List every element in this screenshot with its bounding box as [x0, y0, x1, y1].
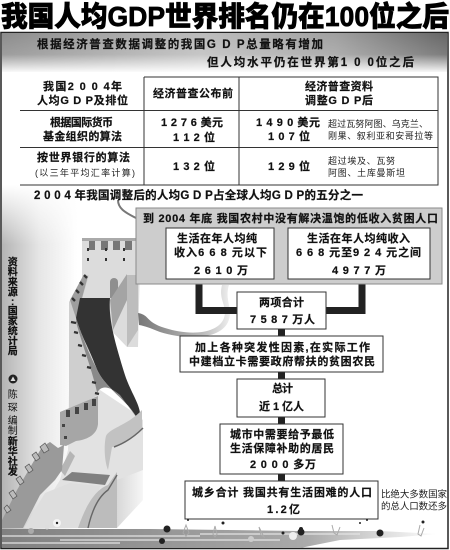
stairs: [60, 451, 75, 476]
box: urban: 生活保障补助的居民: [230, 441, 334, 455]
box: urban: 2 0 0 0 多万: [250, 457, 316, 471]
walkway lower fill: [117, 430, 143, 528]
subtitle line 1: 根据经济普查数据调整的我国G D P总量略有增加: [37, 37, 323, 51]
table header: before: 经济普查公布前: [153, 86, 233, 100]
comparison table: [20, 77, 438, 185]
source text: 统: [8, 324, 18, 337]
source text: 来: [8, 275, 18, 288]
value: 1276: 1 2 7 6 美元: [161, 115, 223, 129]
table header: after line 2: 调整G D P后: [305, 93, 373, 107]
box: additional poor: [180, 336, 383, 372]
source text: 局: [8, 345, 18, 357]
flowers: [28, 519, 424, 544]
note: WB countries line 2: 阿图、土库曼斯坦: [328, 167, 405, 178]
row label: World Bank: 按世界银行的算法: [37, 150, 130, 164]
value: 129: 1 2 9 位: [268, 159, 310, 173]
source text: 家: [8, 314, 18, 327]
box: subtotal: 两项合计: [259, 295, 304, 309]
source text: 源: [8, 285, 18, 298]
box: below 668: 2 6 1 0 万: [194, 264, 248, 277]
table header: row label: 我国2 0 0 4年: [43, 79, 122, 93]
icon: author emblem: [8, 374, 18, 384]
box: total: 总计: [272, 381, 293, 395]
box: subtotal: [237, 292, 326, 329]
source credit: [8, 256, 18, 478]
box: total: 近 1 亿人: [259, 399, 304, 413]
tower: [82, 240, 140, 347]
row label: IMF: 根据国际货币: [50, 115, 113, 129]
box: grand total: [185, 481, 378, 519]
box: 668 to 924: [288, 228, 430, 279]
box: 668 to 924: 生活在年人均纯收入: [307, 231, 410, 245]
author: 陈: [8, 388, 18, 400]
curved upper band: [105, 410, 142, 470]
edited: 制: [8, 424, 18, 436]
lower right band: [78, 472, 117, 528]
dark road: [76, 298, 140, 418]
source text: 料: [8, 265, 18, 278]
row label: IMF line 2: 基金组织的算法: [43, 129, 122, 143]
box: additional poor: 加上各种突发性因素,在实际工作: [195, 340, 370, 354]
box: grand total: 城乡合计 我国共有生活困难的人口: [192, 485, 372, 499]
table header: row label line 2: 人均G D P及排位: [37, 93, 128, 107]
box: subtotal: 7 5 8 7 万人: [250, 313, 315, 326]
source text: :: [11, 296, 14, 308]
agency: 发: [8, 464, 18, 478]
box: 668 to 924: 6 6 8 元至9 2 4 元之间: [296, 245, 421, 259]
text: one fifth statement: 2 0 0 4 年我国调整后的人均G D P占全球人均G D P的五分之一: [34, 188, 364, 202]
left wall: [69, 275, 98, 410]
note: compared to countries: 的总人口数还多: [381, 500, 447, 512]
box: urban: [220, 424, 343, 474]
note: IMF countries: 超过瓦努阿图、乌克兰、: [328, 118, 428, 129]
left background shading: [2, 185, 77, 530]
panel heading: 到 2004 年底 我国农村中没有解决温饱的低收入贫困人口: [143, 211, 438, 225]
source text: 计: [8, 334, 18, 347]
value: 112: 1 1 2 位: [173, 130, 215, 144]
panel: rural poverty: [136, 208, 442, 284]
box: grand total: 1 . 2 亿: [267, 502, 300, 516]
panel: subtitle banner: [2, 33, 447, 72]
value: 132: 1 3 2 位: [173, 159, 215, 173]
source text: 资: [8, 256, 18, 268]
crenel dashes: [71, 275, 99, 394]
icon: connecting ribbon: [118, 200, 230, 337]
note: compared to countries: 比绝大多数国家: [381, 488, 447, 500]
note: compared to countries: [381, 488, 447, 512]
tower doorway: [110, 278, 118, 298]
note: IMF countries line 2: 刚果、叙利亚和安哥拉等: [328, 130, 433, 141]
row label: World Bank note: (以三年平均汇率计算): [35, 167, 135, 178]
middle crenellated wall: [60, 396, 98, 446]
agency: 华: [8, 444, 18, 458]
edited: 编: [8, 414, 18, 426]
lower left wall: [2, 442, 64, 528]
author: 琛: [8, 402, 18, 414]
icon: Great Wall illustration: [2, 238, 143, 528]
box: below 668: 生活在年人均纯: [177, 231, 257, 245]
source text: 国: [8, 305, 18, 317]
box: below 668: 收入6 6 8 元以下: [174, 245, 267, 259]
value: 107: 1 0 7 位: [268, 129, 310, 143]
value: 1490: 1 4 9 0 美元: [256, 115, 320, 129]
agency: 新: [8, 434, 18, 448]
connectors: [199, 284, 362, 310]
agency: 社: [8, 454, 18, 468]
box: additional poor: 中建档立卡需要政府帮扶的贫困农民: [189, 354, 375, 368]
box: urban: 城市中需要给予最低: [230, 427, 334, 441]
box: below 668: [166, 228, 274, 279]
table header: after: 经济普查资料: [305, 79, 373, 93]
ground with flowers: [2, 519, 438, 548]
box: 668 to 924: 4 9 7 7 万: [332, 264, 386, 277]
box: total: [237, 379, 325, 417]
subtitle line 2: 但人均水平仍在世界第1 0 0位之后: [207, 55, 414, 69]
note: WB countries: 超过埃及、瓦努: [328, 155, 395, 166]
